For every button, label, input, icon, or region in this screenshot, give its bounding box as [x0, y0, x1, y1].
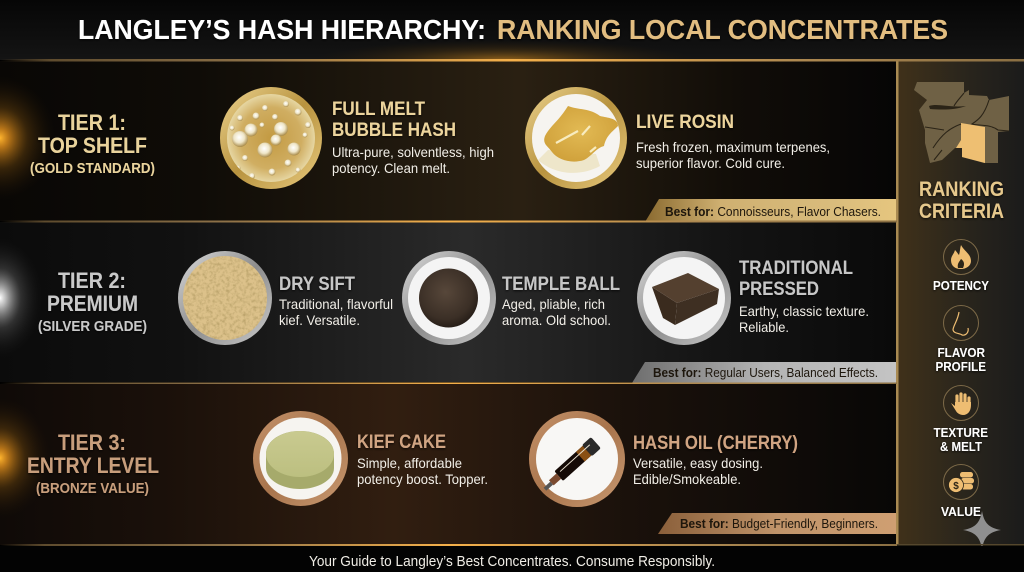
product image: traditional pressed [637, 251, 731, 345]
tier 1 heading [30, 110, 155, 177]
traditional pressed text: TRADITIONAL [739, 258, 853, 279]
temple ball text [502, 274, 620, 328]
full melt text: Ultra-pure, solventless, high [332, 144, 494, 160]
tier 1 heading: (GOLD STANDARD) [30, 161, 155, 177]
traditional pressed text: PRESSED [739, 279, 819, 300]
live rosin text: Fresh frozen, maximum terpenes, [636, 139, 830, 155]
sidebar heading: RANKING [919, 178, 1004, 201]
temple ball text: aroma. Old school. [502, 312, 611, 328]
best for tag: tier 2 [632, 362, 897, 383]
map of Langley region [914, 82, 1009, 163]
tier 3 heading: TIER 3: [58, 430, 126, 455]
traditional pressed text: Earthy, classic texture. [739, 303, 869, 319]
panel: tier 1 [0, 61, 897, 222]
footer bar [0, 546, 1024, 572]
label: value: VALUE [941, 504, 981, 519]
label: flavor profile: FLAVOR [938, 345, 986, 360]
product image: dry sift [178, 251, 272, 345]
icon: nose [944, 306, 978, 340]
tier 2 heading: TIER 2: [58, 268, 126, 293]
product image: kief cake [253, 411, 348, 506]
live rosin text: LIVE ROSIN [636, 112, 734, 133]
dry sift text: DRY SIFT [279, 274, 355, 295]
traditional pressed text [739, 258, 869, 335]
hash oil text: Versatile, easy dosing. [633, 455, 763, 471]
title: LANGLEY’S HASH HIERARCHY: [78, 14, 486, 45]
label: texture and melt: TEXTURE [934, 425, 988, 440]
footer text: Your Guide to Langley’s Best Concentrates. Consume Responsibly. [309, 554, 715, 570]
label: flavor profile [936, 345, 986, 374]
panel: ranking criteria sidebar [896, 61, 1024, 549]
tier 2 heading: (SILVER GRADE) [38, 319, 147, 335]
hash oil text: HASH OIL (CHERRY) [633, 433, 798, 454]
full melt text: potency. Clean melt. [332, 160, 450, 176]
panel: tier 3 [0, 384, 897, 545]
sidebar heading [919, 178, 1004, 223]
tier 3 heading [27, 430, 159, 497]
icon: hand [944, 386, 978, 420]
live rosin text: superior flavor. Cold cure. [636, 155, 785, 171]
best for tag: tier 3 [658, 513, 897, 534]
title: RANKING LOCAL CONCENTRATES [497, 14, 948, 45]
kief cake text: KIEF CAKE [357, 432, 446, 453]
traditional pressed text: Reliable. [739, 319, 789, 335]
sidebar heading: CRITERIA [919, 200, 1004, 223]
header bar [0, 0, 1024, 60]
best for tag: tier 3: Best for: Budget-Friendly, Beginners. [680, 517, 878, 531]
hash oil text: Edible/Smokeable. [633, 471, 741, 487]
header glow [315, 40, 695, 80]
temple ball text: Aged, pliable, rich [502, 296, 605, 312]
tier 2 heading [38, 268, 147, 335]
dry sift text: Traditional, flavorful [279, 296, 393, 312]
icon: coins: $ [953, 481, 959, 492]
tier 3 heading: ENTRY LEVEL [27, 453, 159, 478]
icon: flame [944, 240, 978, 274]
hash oil text [633, 433, 798, 487]
label: texture and melt: & MELT [940, 439, 982, 454]
full melt text [332, 99, 494, 176]
live rosin text [636, 112, 830, 171]
product image: temple ball [402, 251, 496, 345]
title [78, 14, 948, 45]
tier 3 heading: (BRONZE VALUE) [36, 481, 149, 497]
product image: full melt bubble hash [220, 87, 322, 189]
best for tag: tier 1: Best for: Connoisseurs, Flavor Chasers. [665, 205, 881, 219]
tier 1 heading: TOP SHELF [38, 133, 147, 158]
dry sift text [279, 274, 393, 328]
icon: coins [944, 464, 978, 500]
kief cake text [357, 432, 488, 487]
label: potency: POTENCY [933, 278, 989, 293]
temple ball text: TEMPLE BALL [502, 274, 620, 295]
label: texture and melt [934, 425, 988, 454]
best for tag: tier 1 [645, 199, 897, 222]
best for tag: tier 2: Best for: Regular Users, Balanced Effects. [653, 366, 878, 380]
panel: tier 2 [0, 222, 897, 383]
tier 2 heading: PREMIUM [47, 291, 138, 316]
full melt text: FULL MELT [332, 99, 425, 120]
label: flavor profile: PROFILE [936, 359, 986, 374]
tier 1 heading: TIER 1: [58, 110, 126, 135]
dry sift text: kief. Versatile. [279, 312, 360, 328]
kief cake text: Simple, affordable [357, 455, 462, 471]
product image: hash oil syringe [529, 411, 625, 507]
product image: live rosin [525, 87, 627, 189]
full melt text: BUBBLE HASH [332, 120, 456, 141]
icon: sparkle watermark [963, 511, 1001, 549]
kief cake text: potency boost. Topper. [357, 471, 488, 487]
